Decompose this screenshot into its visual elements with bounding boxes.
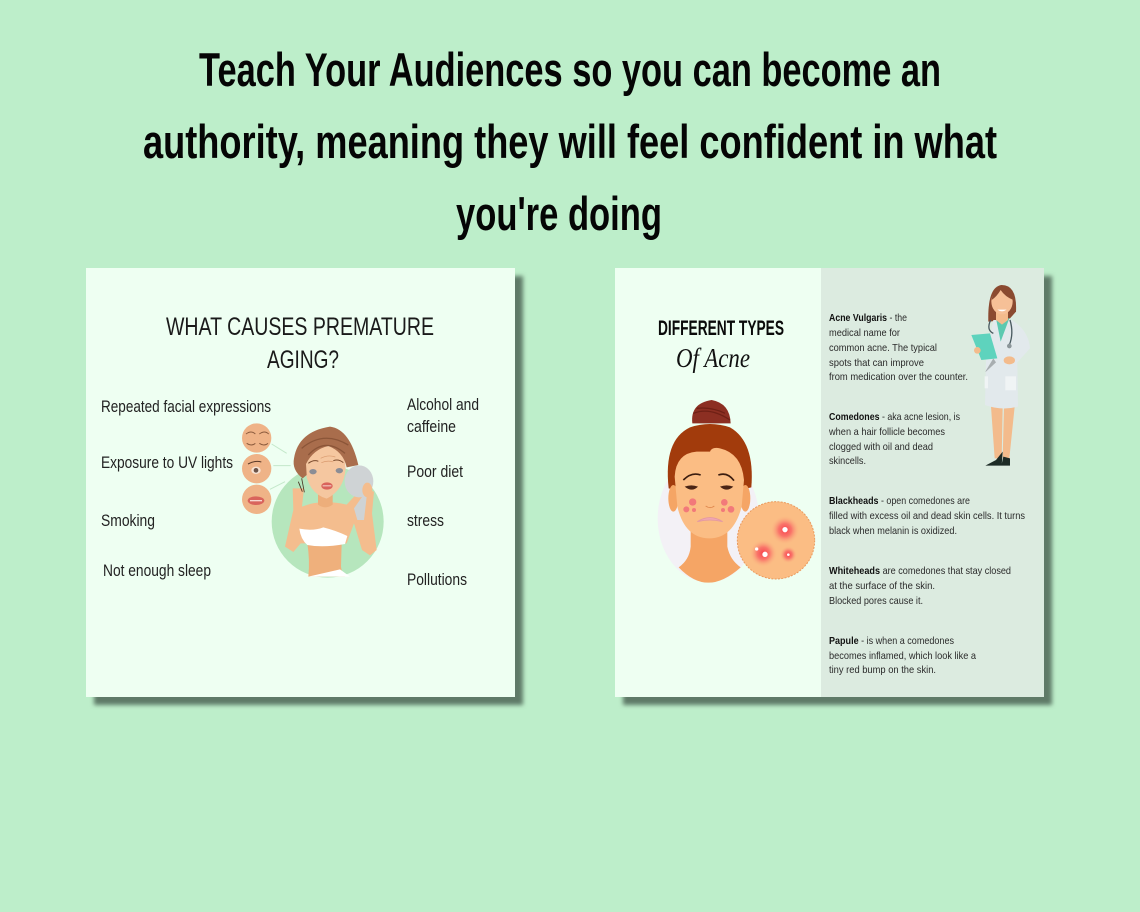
left list of causes: Smoking xyxy=(101,512,155,530)
text: acne vulgaris xyxy=(829,312,968,383)
right list of causes xyxy=(407,396,479,589)
panel heading: what causes premature aging: AGING? xyxy=(267,346,339,374)
illustration: doctor xyxy=(971,285,1030,466)
left list of causes: Not enough sleep xyxy=(103,562,211,580)
panel: premature aging xyxy=(86,268,523,705)
panel heading: different types of acne: DIFFERENT TYPES xyxy=(658,317,784,340)
text: acne vulgaris: common acne. The typical xyxy=(829,342,937,354)
text: comedones: Comedones - aka acne lesion, is xyxy=(829,411,960,423)
illustration: woman with acne xyxy=(658,400,815,583)
panel: different types of acne xyxy=(615,268,1052,705)
text: blackheads xyxy=(829,495,1025,537)
left list of causes: Repeated facial expressions xyxy=(101,398,271,416)
panel heading: what causes premature aging: WHAT CAUSES PREMATURE xyxy=(166,313,434,341)
text: comedones: when a hair follicle becomes xyxy=(828,426,945,438)
text: papule: tiny red bump on the skin. xyxy=(829,664,936,676)
right list of causes: caffeine xyxy=(407,418,456,436)
text: acne vulgaris: spots that can improve xyxy=(829,357,924,369)
text: blackheads: filled with excess oil and dead skin cells. It turns xyxy=(829,510,1025,522)
text: papule xyxy=(829,635,976,676)
text: whiteheads: at the surface of the skin. xyxy=(829,580,935,592)
right list of causes: Pollutions xyxy=(407,571,467,589)
right list of causes: Poor diet xyxy=(407,463,463,481)
panel heading: what causes premature aging xyxy=(166,313,434,374)
illustration: woman with wrinkles and mirror xyxy=(242,423,384,578)
text: papule: Papule - is when a comedones xyxy=(829,635,954,647)
title: you're doing xyxy=(456,187,662,240)
text: comedones: clogged with oil and dead xyxy=(829,441,933,453)
panel heading: different types of acne xyxy=(658,317,784,373)
left list of causes xyxy=(101,398,271,580)
text: blackheads: black when melanin is oxidized. xyxy=(829,525,957,537)
text: papule: becomes inflamed, which look like a xyxy=(829,650,976,662)
left list of causes: Exposure to UV lights xyxy=(101,454,233,472)
text: comedones xyxy=(828,411,960,467)
right list of causes: stress xyxy=(407,512,444,530)
text: blackheads: Blackheads - open comedones are xyxy=(829,495,970,507)
text: whiteheads xyxy=(829,565,1011,607)
text: comedones: skincells. xyxy=(829,455,866,467)
text: acne vulgaris: medical name for xyxy=(829,327,900,339)
text: whiteheads: Whiteheads are comedones that stay closed xyxy=(829,565,1011,577)
text: acne vulgaris: from medication over the counter. xyxy=(829,371,968,383)
panel heading: different types of acne: Of Acne xyxy=(676,343,750,373)
text: acne vulgaris: Acne Vulgaris - the xyxy=(829,312,907,324)
title xyxy=(143,43,997,240)
text: whiteheads: Blocked pores cause it. xyxy=(829,595,923,607)
right list of causes: Alcohol and xyxy=(407,396,479,414)
